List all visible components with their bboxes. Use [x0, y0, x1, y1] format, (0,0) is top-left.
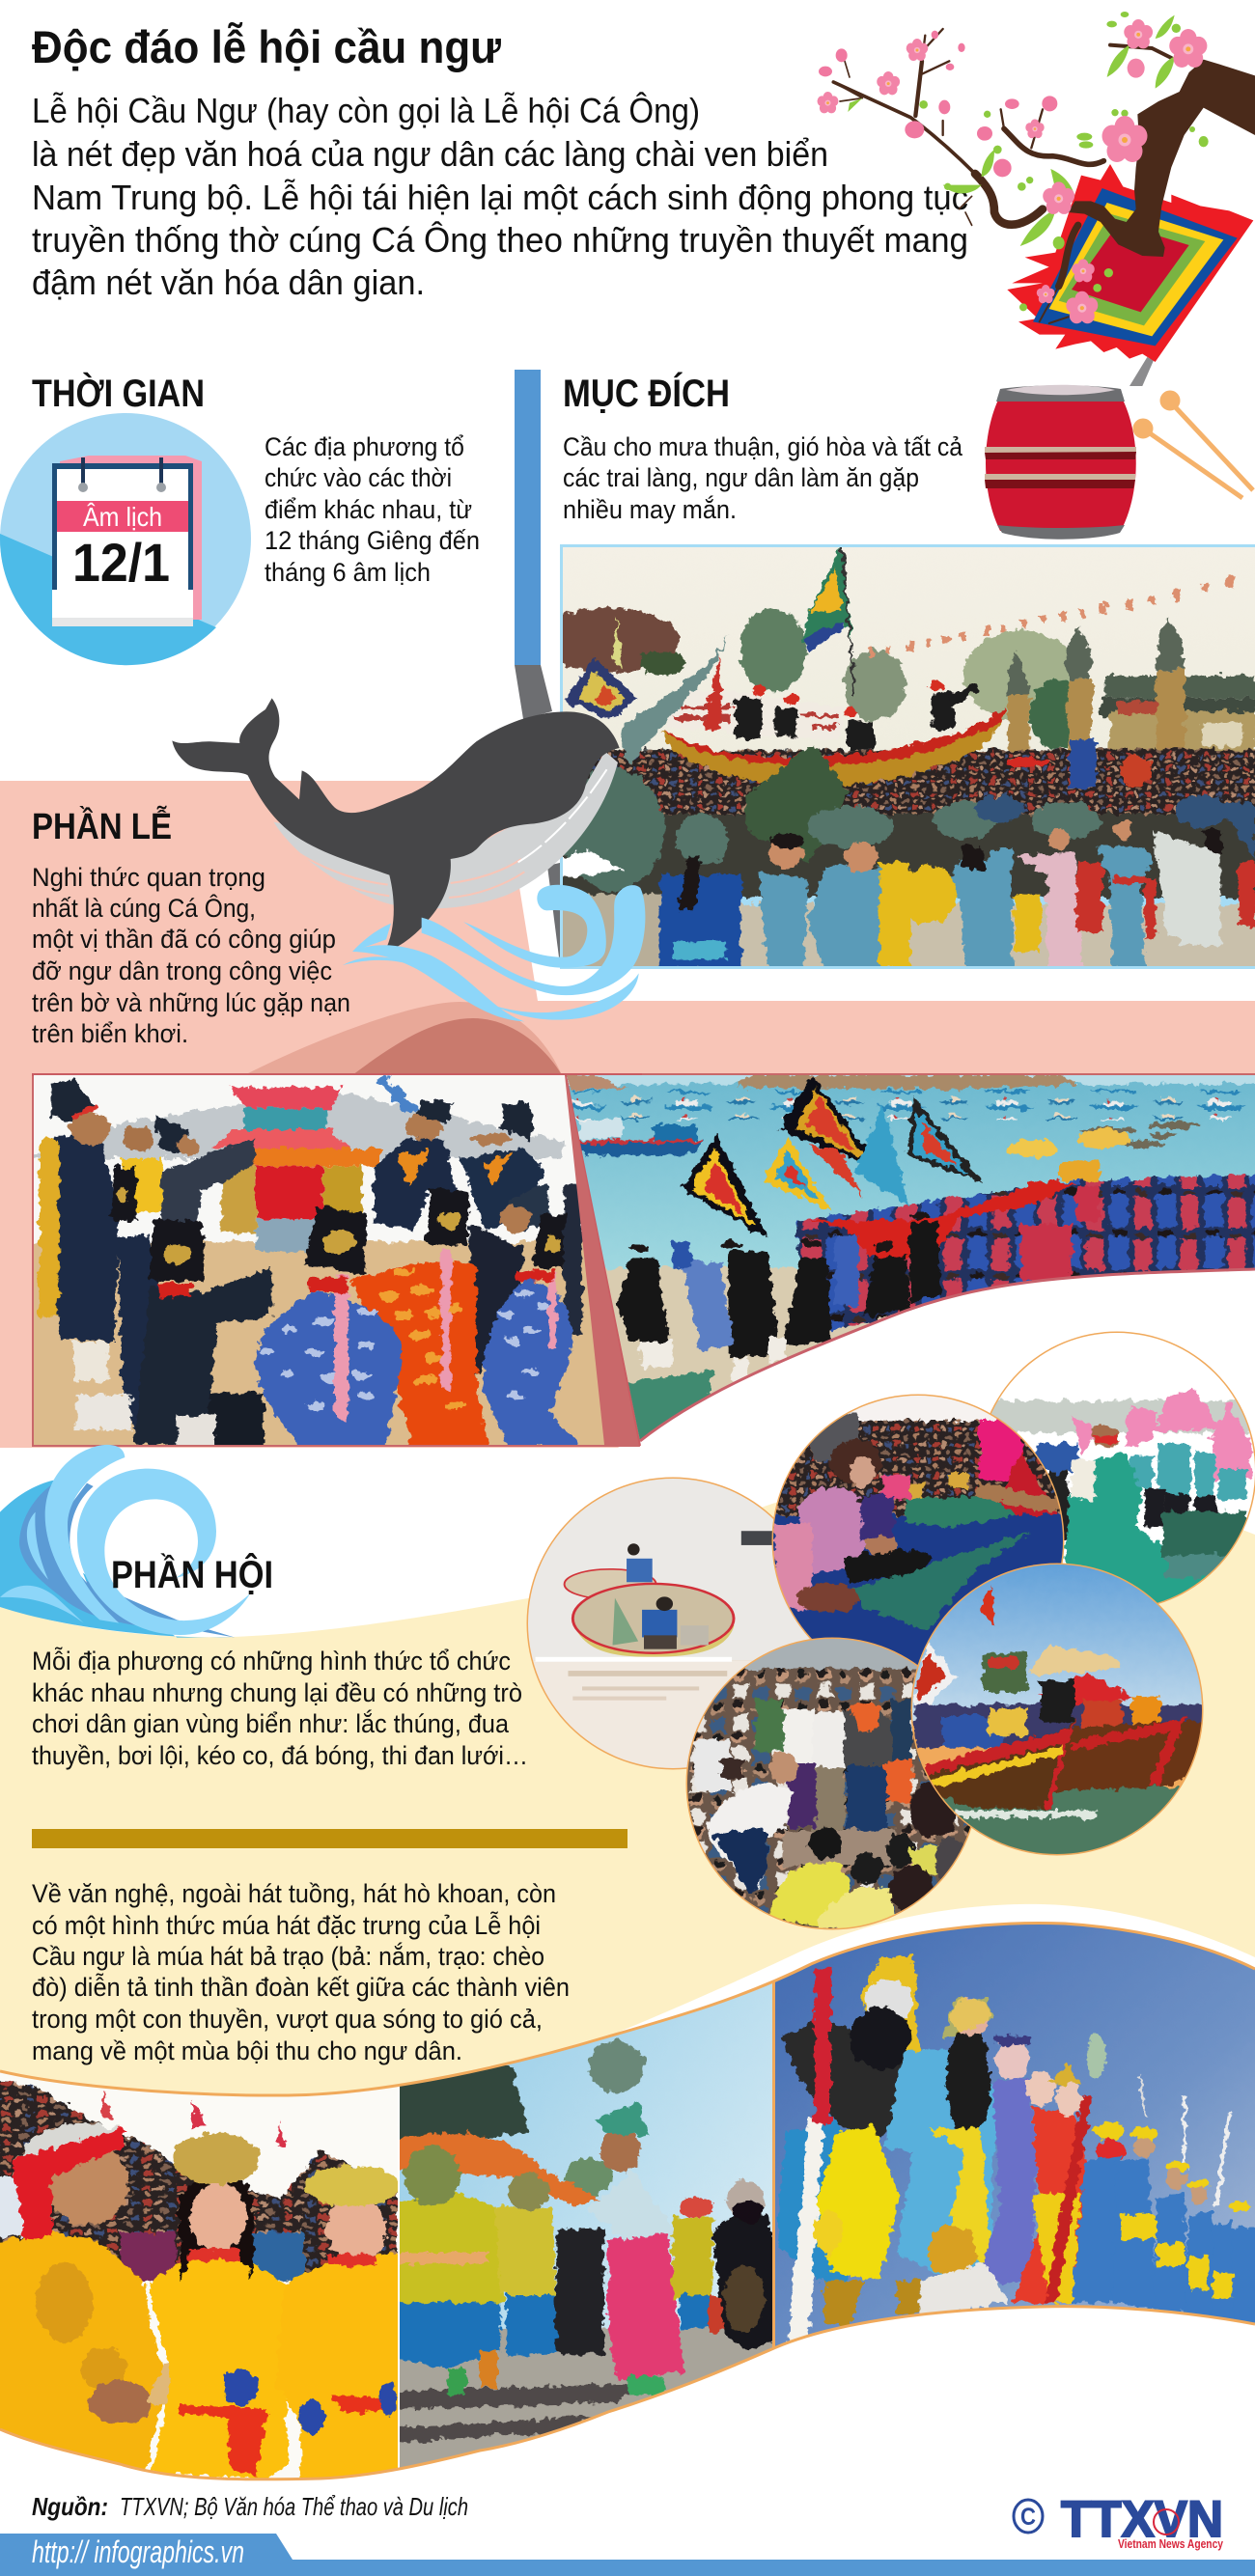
heading: Thời gian: THỜI GIAN [32, 371, 205, 415]
text: phần lễ: một vị thần đã có công giúp [32, 925, 336, 954]
photo: flag procession at the harbour [567, 1075, 1255, 1442]
text: thời gian: 12 tháng Giêng đến [265, 526, 480, 555]
illustration: whale and waves [172, 698, 645, 1021]
photo: singers in yellow [0, 2059, 408, 2495]
title: Độc đáo lễ hội cầu ngư [32, 21, 502, 72]
text: thời gian: điểm khác nhau, từ [265, 495, 472, 524]
orange photo band outline [0, 1923, 1255, 2479]
text: trò chơi dân gian: khác nhau nhưng chung lại đều có những trò [32, 1678, 522, 1707]
heading: Mục đích: MỤC ĐÍCH [563, 372, 730, 415]
text: trò chơi dân gian [32, 1646, 528, 1770]
intro text: Lễ hội Cầu Ngư (hay còn gọi là Lễ hội Cá Ông) [32, 91, 700, 130]
source line [32, 2492, 468, 2521]
source line: TTXVN; Bộ Văn hóa Thể thao và Du lịch [120, 2492, 468, 2521]
text: mục đích: các trai làng, ngư dân làm ăn gặp [563, 463, 919, 492]
photo circle: tug of war crowd [685, 1637, 971, 1930]
decorative hills behind photos [244, 1002, 562, 1075]
text: trò chơi dân gian: Mỗi địa phương có những hình thức tổ chức [32, 1646, 511, 1676]
logo: TTXVN: Vietnam News Agency [1118, 2536, 1224, 2551]
text: mục đích: Cầu cho mưa thuận, gió hòa và tất cả [563, 432, 963, 461]
intro text: Nam Trung bộ. Lễ hội tái hiện lại một cách sinh động phong tục [32, 178, 968, 217]
intro text: truyền thống thờ cúng Cá Ông theo những truyền thuyết mang [32, 220, 968, 260]
photo band: bả trạo singers and performers [0, 1911, 1255, 2509]
text: phần lễ: nhất là cúng Cá Ông, [32, 893, 256, 923]
text: phần lễ: Nghi thức quan trọng [32, 863, 265, 892]
photo circle: decorated festival boat [905, 1559, 1213, 1862]
icon: calendar in blue circle [0, 413, 251, 665]
blue divider bar [515, 370, 564, 957]
footer bar with URL [0, 2534, 1255, 2576]
text: múa hát bả trạo: Cầu ngư là múa hát bả trạo (bả: nắm, trạo: chèo [32, 1941, 544, 1971]
text: thời gian: tháng 6 âm lịch [265, 558, 431, 587]
text: trò chơi dân gian: chơi dân gian vùng biển như: lắc thúng, đua [32, 1708, 510, 1738]
illustration: large blue wave [0, 1445, 251, 1638]
intro text: là nét đẹp văn hoá của ngư dân các làng chài ven biển [32, 134, 828, 174]
text: phần lễ: đỡ ngư dân trong công việc [32, 956, 332, 985]
text: múa hát bả trạo [32, 1879, 570, 2065]
photo: masked tuồng performers [761, 1915, 1255, 2354]
footer bar with URL: http:// infographics.vn [32, 2534, 244, 2569]
source line: Nguồn: [32, 2492, 108, 2521]
text: thời gian: Các địa phương tổ [265, 432, 464, 461]
text: múa hát bả trạo: mang về một mùa bội thu cho ngư dân. [32, 2036, 462, 2065]
heading: Phần Hội: PHẦN HỘI [111, 1552, 273, 1596]
photo: offering ceremony on the beach [4, 1062, 1255, 1460]
photo circle: women weaving nets [772, 1394, 1064, 1666]
panel: pink Phần Lễ background [0, 781, 1255, 1448]
illustration: flag and peach blossom branch [818, 12, 1255, 386]
text: phần lễ: trên biển khơi. [32, 1019, 188, 1048]
icon: calendar in blue circle: Âm lịch [83, 502, 162, 532]
text: múa hát bả trạo: trong một con thuyền, vượt qua sóng to gió cả, [32, 2005, 543, 2034]
text: múa hát bả trạo: Về văn nghệ, ngoài hát tuồng, hát hò khoan, còn [32, 1879, 556, 1908]
heading: Phần Lễ: PHẦN LỄ [32, 805, 172, 847]
logo: TTXVN: TTXVN [1061, 2491, 1223, 2548]
icon: calendar in blue circle: 12/1 [72, 532, 170, 593]
text: múa hát bả trạo: có một hình thức múa hát đặc trưng của Lễ hội [32, 1910, 541, 1940]
gold separator bar [32, 1829, 628, 1848]
intro text [32, 91, 968, 302]
text: trò chơi dân gian: thuyền, bơi lội, kéo co, đá bóng, thi đan lưới… [32, 1741, 528, 1770]
panel: cream Phần Hội background [0, 1478, 1255, 2095]
photo: dragon dance performers [400, 1983, 772, 2467]
text: mục đích: nhiều may mắn. [563, 494, 737, 524]
text: thời gian [265, 432, 480, 587]
photo circle: women pulling fishing net [990, 1332, 1255, 1604]
text: phần lễ [32, 863, 350, 1048]
logo: TTXVN: C [1020, 2504, 1036, 2531]
text: múa hát bả trạo: đò) diễn tả tinh thần đoàn kết giữa các thành viên [32, 1972, 570, 2002]
text: mục đích [563, 432, 963, 524]
text: thời gian: chức vào các thời [265, 463, 452, 492]
intro text: đậm nét văn hóa dân gian. [32, 263, 425, 302]
photo: festival with boat and temple [538, 534, 1255, 982]
white wave band above bottom photos [579, 1904, 1255, 2048]
icon: drum and sticks [985, 385, 1253, 540]
text: phần lễ: trên bờ và những lúc gặp nạn [32, 988, 350, 1017]
photo circle: coracle boats [521, 1472, 819, 1779]
